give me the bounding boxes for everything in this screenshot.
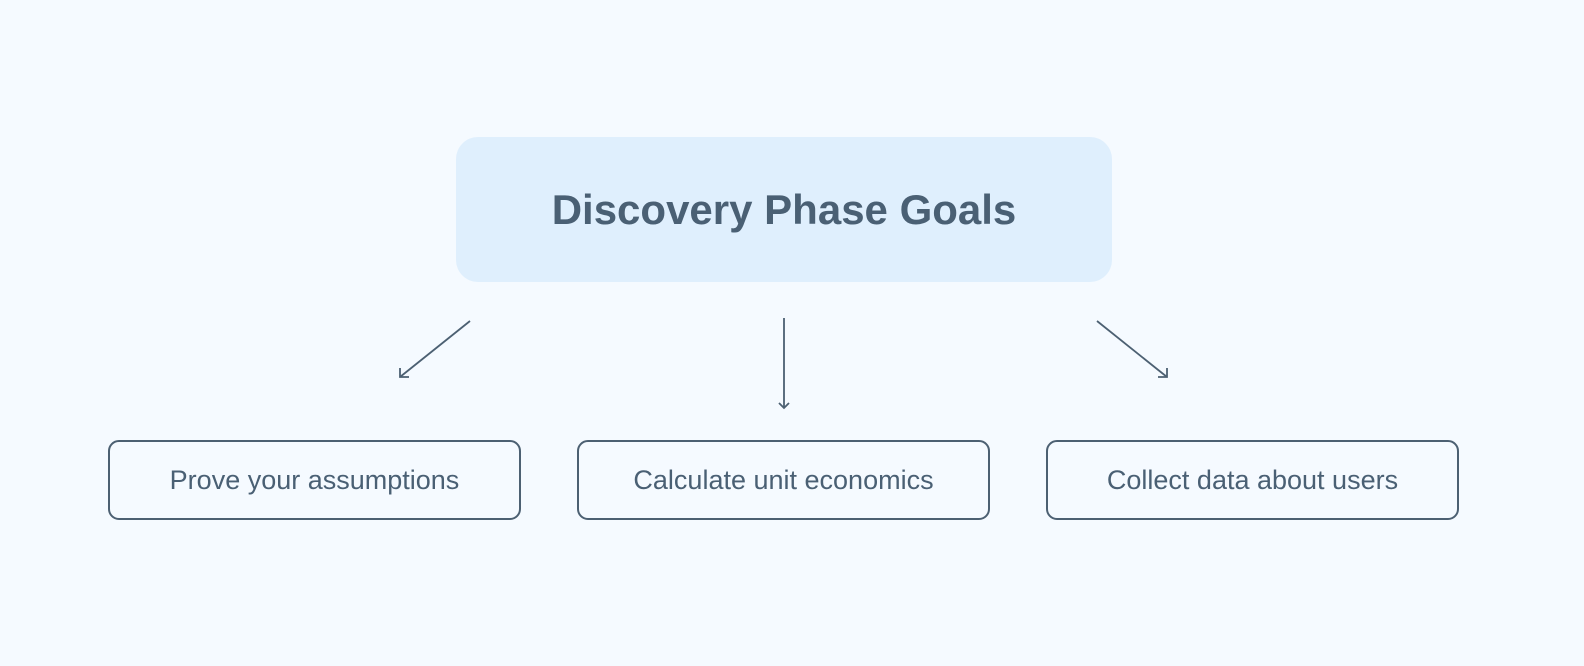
arrow: left — [400, 321, 470, 377]
box: unit economics: Calculate unit economics — [633, 464, 934, 494]
box: prove assumptions: Prove your assumptions — [170, 464, 459, 494]
arrow: right — [1097, 321, 1167, 377]
box: collect data: Collect data about users — [1107, 464, 1398, 494]
title box: Discovery Phase Goals — [552, 186, 1016, 232]
arrow: middle — [779, 318, 789, 408]
box: prove assumptions — [108, 440, 521, 520]
box: unit economics — [577, 440, 990, 520]
box: collect data — [1046, 440, 1459, 520]
title box — [456, 137, 1112, 282]
